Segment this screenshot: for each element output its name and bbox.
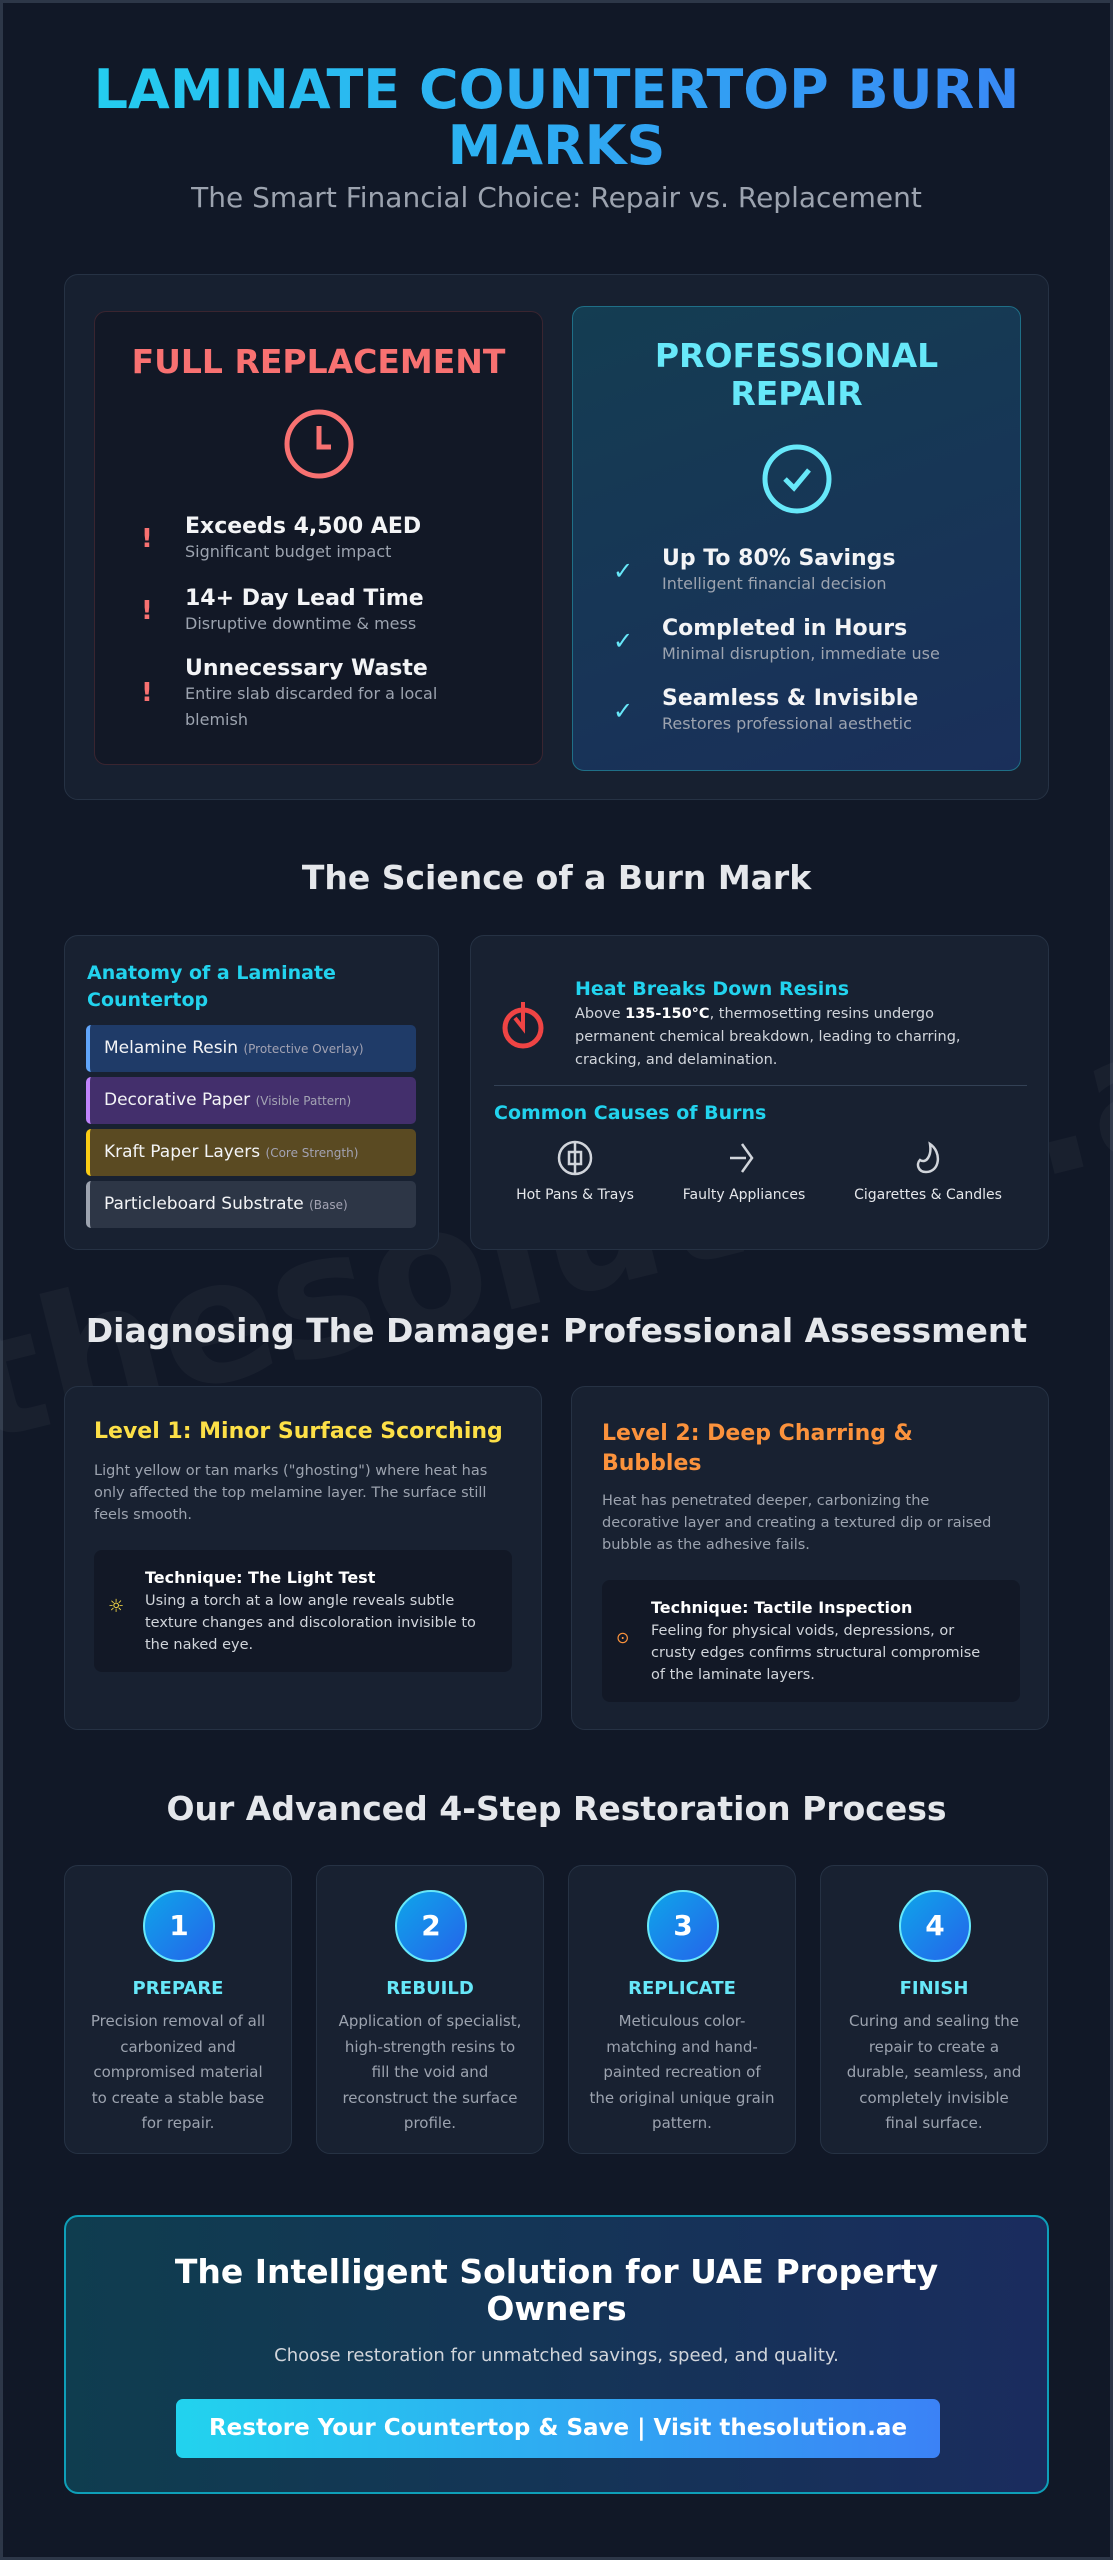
text: light test: Technique: The Light Test: [145, 1568, 375, 1587]
heading: CTA: The Intelligent Solution for UAE Property: [175, 2252, 938, 2291]
box: light test: [94, 1550, 512, 1672]
layer: kraft: Kraft Paper Layers (Core Strength): [104, 1142, 358, 1162]
panel: heat and causes: [470, 935, 1049, 1250]
panel: full replacement: [94, 311, 543, 765]
step 3: the original unique grain: [590, 2088, 774, 2106]
icon: check: ✓: [613, 697, 633, 725]
item: hours: Minimal disruption, immediate use: [662, 644, 940, 663]
icon: warning: !: [141, 678, 153, 708]
panel: comparison: [64, 274, 1049, 800]
item: lead time: [185, 586, 424, 633]
item: cost: Exceeds 4,500 AED: [185, 514, 421, 539]
step 1: PREPARE: [132, 1978, 223, 1999]
text: tactile: Feeling for physical voids, depressions, or crusty edges confirms structural compromise of the laminate layers.: [651, 1623, 980, 1683]
item: savings: Intelligent financial decision: [662, 574, 887, 593]
text: heat: Above 135-150°C, thermosetting resins undergo permanent chemical breakdown, leading to charring, cracking, and delamination.: [575, 1006, 961, 1068]
cause: pans: [516, 1140, 634, 1203]
item: lead time: Disruptive downtime & mess: [185, 614, 416, 633]
heading: professional repair: REPAIR: [730, 374, 863, 413]
panel: anatomy: [64, 935, 439, 1250]
item: cost: Significant budget impact: [185, 542, 391, 561]
heading: causes: Common Causes of Burns: [494, 1102, 766, 1124]
item: lead time: 14+ Day Lead Time: [185, 586, 424, 611]
icon: check: ✓: [613, 627, 633, 655]
item: waste: [185, 656, 437, 729]
cause: pans: Hot Pans & Trays: [516, 1187, 634, 1203]
layer: decorative: Decorative Paper (Visible Pattern): [104, 1090, 351, 1110]
icon: warning: !: [141, 596, 153, 626]
heading: CTA: Owners: [486, 2289, 627, 2328]
text: level 2: Heat has penetrated deeper, carbonizing the decorative layer and creating a textured dip or raised bubble as the adhesive fails.: [602, 1493, 991, 1553]
panel: level 1: [64, 1386, 542, 1730]
layer: particleboard: Particleboard Substrate (Base): [104, 1194, 348, 1214]
box: tactile: [602, 1580, 1020, 1702]
item: waste: Entire slab discarded for a local blemish: [185, 684, 437, 729]
item: seamless: Restores professional aesthetic: [662, 714, 912, 733]
title: MARKS: [448, 114, 665, 177]
heading: professional repair: PROFESSIONAL: [655, 336, 938, 375]
heading: full replacement: FULL REPLACEMENT: [132, 342, 505, 381]
heading: level 2: Level 2: Deep Charring & Bubbles: [602, 1421, 913, 1476]
subtitle: The Smart Financial Choice: Repair vs. Replacement: [191, 181, 922, 214]
step 2: Application of specialist, high-strength resins to fill the void and reconstruct the surface profile.: [339, 2012, 521, 2132]
step 2: [316, 1865, 544, 2154]
step 3: [568, 1865, 796, 2154]
step 3: painted recreation of: [603, 2063, 761, 2081]
heading: heat: Heat Breaks Down Resins: [575, 978, 849, 1000]
panel: professional repair: [572, 306, 1021, 771]
heading: level 1: Level 1: Minor Surface Scorching: [94, 1419, 503, 1444]
icon: clock: [284, 410, 354, 478]
step 3: pattern.: [652, 2114, 712, 2132]
button: [176, 2399, 940, 2458]
icon: sun: ☼: [108, 1596, 124, 1617]
item: cost: [185, 514, 421, 561]
step 3: REPLICATE: [628, 1978, 736, 1999]
icon: check: ✓: [613, 557, 633, 585]
step 4: [820, 1865, 1048, 2154]
heading: diagnosing: Diagnosing The Damage: Professional Assessment: [86, 1311, 1027, 1350]
cause: appliances: Faulty Appliances: [683, 1187, 805, 1203]
layer: melamine: [86, 1025, 416, 1072]
panel: CTA: [64, 2215, 1049, 2494]
item: seamless: [662, 686, 918, 733]
item: savings: Up To 80% Savings: [662, 546, 896, 571]
icon: check circle: [762, 444, 832, 514]
panel: level 2: [571, 1386, 1049, 1730]
layer: melamine: Melamine Resin (Protective Overlay): [104, 1038, 364, 1058]
step 1: Precision removal of all carbonized and compromised material to create a stable base for repair.: [91, 2012, 265, 2132]
item: seamless: Seamless & Invisible: [662, 686, 918, 711]
button: Restore Your Countertop & Save | Visit thesolution.ae: [209, 2415, 907, 2441]
item: savings: [662, 546, 896, 593]
layer: particleboard: [86, 1181, 416, 1228]
icon: heat gauge: [502, 1002, 544, 1048]
step 3: Meticulous color-: [619, 2012, 745, 2030]
text: level 1: Light yellow or tan marks ("ghosting") where heat has only affected the top melamine layer. The surface still feels smooth.: [94, 1463, 487, 1523]
step 3: 3: [673, 1909, 693, 1942]
step 1: 1: [169, 1909, 189, 1942]
title: [94, 58, 1019, 177]
step 3: matching and hand-: [606, 2038, 758, 2056]
step 2: REBUILD: [386, 1978, 474, 1999]
layer: kraft: [86, 1129, 416, 1176]
title: LAMINATE COUNTERTOP BURN: [94, 58, 1019, 121]
step 4: FINISH: [900, 1978, 968, 1999]
text: tactile: Technique: Tactile Inspection: [651, 1598, 912, 1617]
item: waste: Unnecessary Waste: [185, 656, 428, 681]
step 4: Curing and sealing the repair to create a durable, seamless, and completely invisible final surface.: [847, 2012, 1021, 2132]
heading: professional repair: [655, 336, 938, 413]
step 1: [64, 1865, 292, 2154]
text: light test: Using a torch at a low angle reveals subtle texture changes and discoloration invisible to the naked eye.: [145, 1593, 476, 1653]
cause: cigarettes: Cigarettes & Candles: [854, 1187, 1002, 1203]
item: hours: Completed in Hours: [662, 616, 907, 641]
heading: science: The Science of a Burn Mark: [302, 858, 811, 897]
cause: cigarettes: [854, 1142, 1002, 1203]
icon: warning: !: [141, 524, 153, 554]
layer: decorative: [86, 1077, 416, 1124]
step 4: 4: [925, 1909, 945, 1942]
item: hours: [662, 616, 940, 663]
cause: appliances: [683, 1143, 805, 1203]
heading: process: Our Advanced 4-Step Restoration Process: [166, 1789, 946, 1828]
heading: anatomy: Anatomy of a Laminate Countertop: [87, 962, 336, 1011]
icon: hand: ⊙: [616, 1628, 629, 1647]
step 2: 2: [421, 1909, 441, 1942]
heading: CTA: [175, 2252, 938, 2328]
text: CTA: Choose restoration for unmatched savings, speed, and quality.: [274, 2345, 839, 2366]
